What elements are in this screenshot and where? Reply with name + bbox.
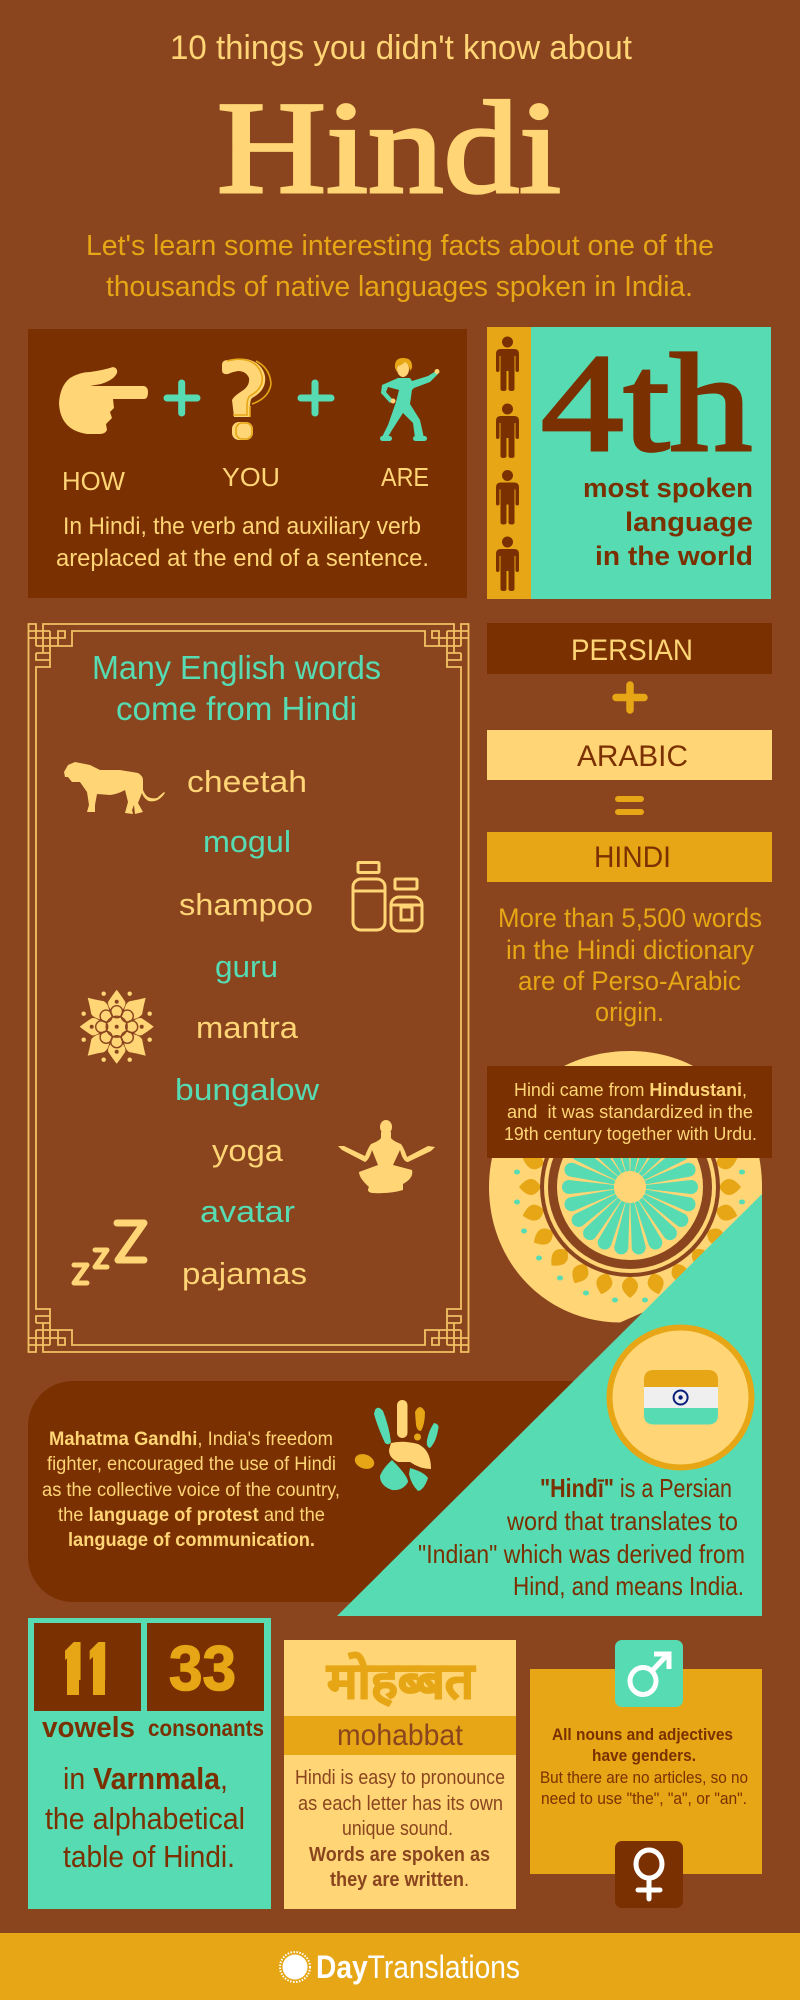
panel: genders [530,1640,762,1908]
stat: 4th: 4th [541,326,752,481]
icon: pointing hand [59,367,148,434]
word in Devanagari: मोहब्बत [326,1652,476,1709]
stat: 33 consonants [147,1623,264,1741]
text: pronunciation: as each letter has its own [298,1793,503,1815]
text: Varnmala [45,1761,245,1874]
text: pronunciation [295,1767,505,1891]
icon: yoga pose [338,1120,435,1193]
text: Persian word: "Indian" which was derived from [418,1539,745,1569]
callout: Hindustani: 19th century together with Urdu. [504,1123,757,1144]
text: Perso-Arabic [498,903,762,1027]
stat: 11 vowels: vowels [42,1712,135,1744]
title: Hindi: Hindi [217,74,561,221]
panel: Varnmala [28,1618,271,1909]
text: Perso-Arabic: are of Perso-Arabic [518,966,741,996]
band: mohabbat: mohabbat [337,1719,464,1752]
panel: 4th most spoken [487,326,771,599]
label: ARE: ARE [381,462,429,492]
text: Gandhi [42,1429,340,1551]
subtitle: Let's learn some interesting facts about one of the [86,230,714,262]
text: word order [56,513,429,572]
spokes [562,1119,698,1255]
icon: plus [167,383,197,413]
callout: Hindustani: and it was standardized in the [507,1101,753,1122]
text: pronunciation: unique sound. [342,1818,453,1840]
panel: English words from Hindi [28,624,468,1352]
header [86,29,714,303]
text: word order: areplaced at the end of a sentence. [56,545,429,572]
heading: Many English words [92,649,381,686]
icon: flag badge [610,1328,752,1468]
word list: cheetah [187,764,307,799]
word list: yoga [212,1133,284,1168]
ornamental frame [28,624,468,1352]
icon: cheetah [64,762,165,814]
logo wordmark: DayTranslations [316,1949,520,1985]
bar: Persian: PERSIAN [571,634,693,667]
icon: mandala [80,990,154,1064]
text: Varnmala: in Varnmala, [63,1761,228,1796]
text: Persian word [418,1473,745,1601]
word list: shampoo [179,887,313,922]
panel: word order [28,329,467,598]
equation: Persian + Arabic = Hindi [487,623,772,1027]
logo mark [280,1952,310,1982]
word list [175,764,320,1291]
stat: 11 vowels [34,1623,141,1744]
word list: avatar [200,1194,295,1229]
label: YOU: YOU [222,462,280,492]
text: Gandhi: fighter, encouraged the use of Hindi [47,1454,336,1475]
word list: bungalow [175,1072,320,1107]
bar: Hindi [487,832,772,882]
word list: pajamas [182,1256,307,1291]
caption [583,473,753,571]
text: Perso-Arabic: origin. [595,997,664,1027]
text: Perso-Arabic: in the Hindi dictionary [506,935,754,965]
text: Gandhi: Mahatma Gandhi, India's freedom [49,1429,333,1450]
panel: mohabbat [284,1640,516,1909]
callout: Hindustani [487,1066,772,1158]
stat: 11 vowels: 11 [62,1627,114,1712]
word list: guru [215,949,278,984]
illustration: chakra wheel [489,1051,762,1322]
subtitle [86,230,714,303]
text: genders: But there are no articles, so no [540,1769,748,1787]
text: Persian word: "Hindī" is a Persian [540,1473,732,1503]
text: Persian word: word that translates to [506,1506,738,1536]
icon: female symbol [615,1841,683,1908]
text: genders: All nouns and adjectives [552,1726,733,1744]
panel: teal triangle, Hindi means Indian [337,1194,762,1616]
bar: Persian [487,623,772,674]
caption: language [625,507,753,537]
stat: 33 consonants: consonants [148,1715,264,1741]
petals and dots [514,1076,745,1302]
text: Persian word: Hind, and means India. [513,1571,744,1601]
word list: mantra [196,1010,299,1045]
footer [0,1933,800,2000]
bar: Arabic [487,730,772,780]
bar: Arabic: ARABIC [577,740,688,773]
text: pronunciation: Hindi is easy to pronounce [295,1767,505,1789]
text: genders: have genders. [592,1747,696,1765]
text: Gandhi: language of communication. [68,1530,315,1551]
caption: in the world [595,541,753,571]
text: genders: need to use "the", "a", or "an". [541,1790,747,1808]
icon: sleep zzz [74,1223,144,1283]
text: pronunciation: Words are spoken as [309,1844,490,1866]
text: Gandhi: as the collective voice of the country, [42,1480,340,1501]
icon: people [496,336,519,591]
caption: most spoken [583,473,753,503]
text: Perso-Arabic: More than 5,500 words [498,903,762,933]
title: kicker: 10 things you didn't know about [170,29,633,67]
band: mohabbat [284,1716,516,1755]
panel: Mahatma Gandhi [28,1381,610,1602]
callout: Hindustani: Hindi came from Hindustani, [514,1079,747,1100]
icon: equals [618,799,641,812]
icon: dancer [380,358,440,441]
icon: plus [616,685,644,710]
bar: Hindi: HINDI [594,841,671,874]
icon: hand print [353,1400,438,1491]
text: Varnmala: the alphabetical [45,1801,245,1836]
text: Varnmala: table of Hindi. [63,1839,235,1874]
text: genders [540,1726,748,1808]
text: pronunciation: they are written. [330,1869,469,1891]
icon: plus [301,383,331,413]
icon: question mark [222,359,271,440]
heading [92,649,381,727]
stat: 33 consonants: 33 [169,1634,236,1704]
icon: bottles [353,862,422,931]
subtitle: thousands of native languages spoken in India. [106,271,693,303]
icon: male symbol [615,1640,683,1707]
text: word order: In Hindi, the verb and auxiliary verb [63,513,421,540]
text: Gandhi: the language of protest and the [58,1505,325,1526]
word list: mogul [203,824,291,859]
label: HOW: HOW [62,466,125,496]
heading: come from Hindi [116,690,357,727]
